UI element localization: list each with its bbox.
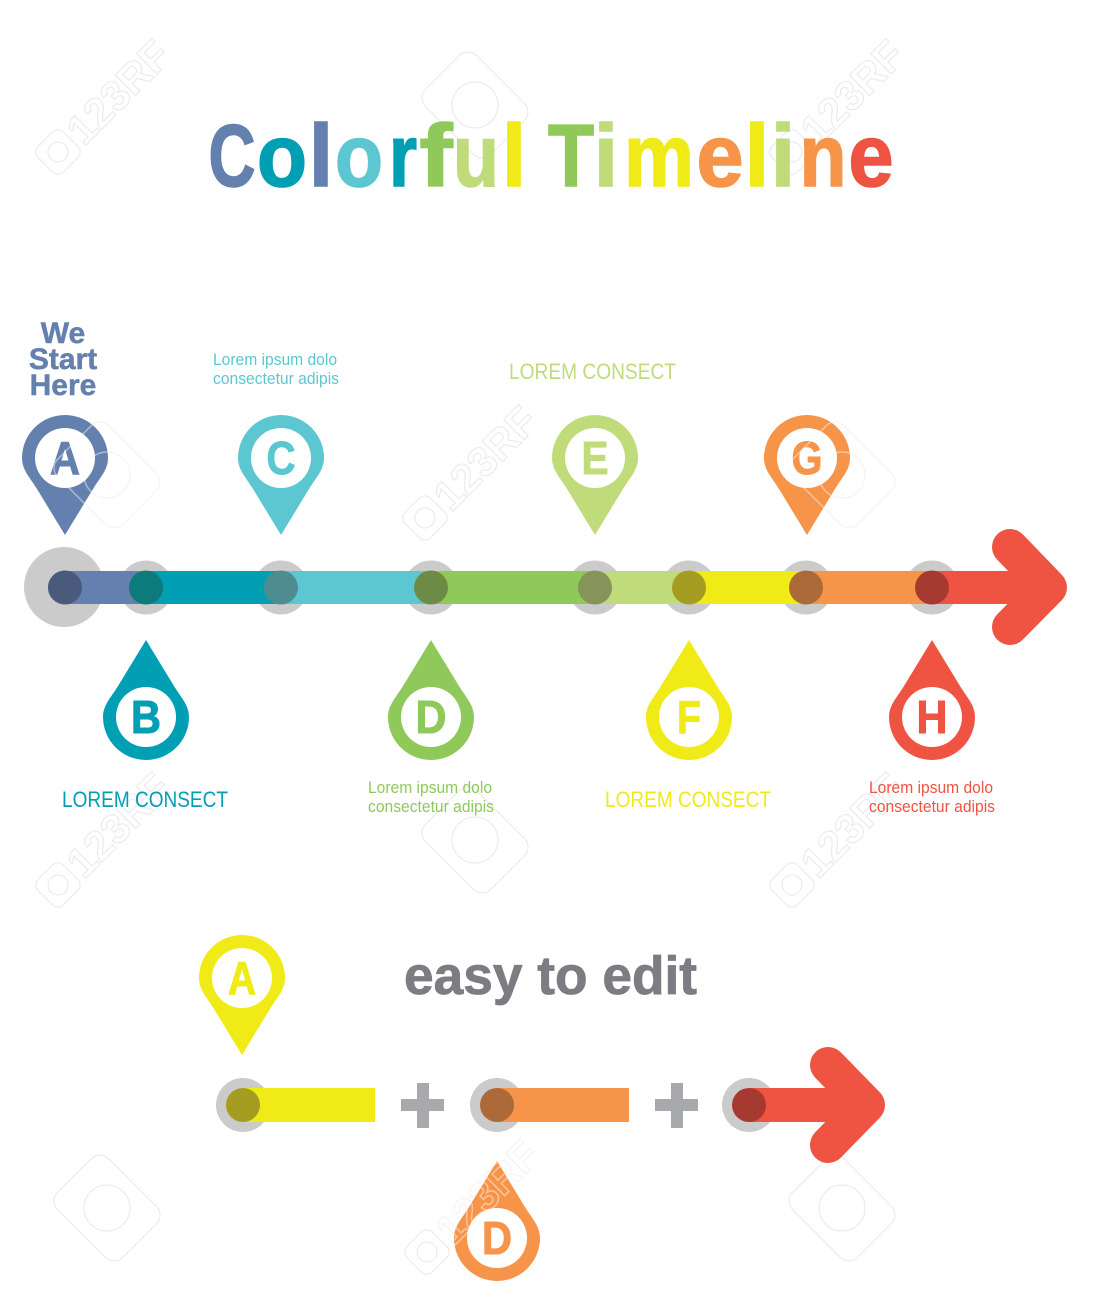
title: o (257, 106, 307, 205)
pin E: E (582, 432, 608, 484)
drop H: H (916, 691, 948, 743)
watermark stamps: 123RF (424, 397, 547, 519)
drop F: F (677, 691, 701, 743)
title: e (696, 106, 744, 205)
title: f (420, 106, 453, 205)
pin A yellow: A (228, 952, 256, 1004)
segment: red arrow (722, 1065, 867, 1145)
text block: B caption: LOREM CONSECT (62, 787, 228, 812)
pin A: A (50, 432, 80, 484)
title: i (594, 106, 618, 205)
title: l (502, 106, 526, 205)
text block: F caption: LOREM CONSECT (605, 787, 771, 812)
title: o (335, 106, 383, 205)
text block: E caption: LOREM CONSECT (509, 359, 676, 384)
pin A yellow (199, 935, 285, 1055)
title: l (745, 106, 769, 205)
title (208, 106, 894, 205)
segment: orange bar (470, 1078, 629, 1132)
title: l (309, 106, 333, 205)
heading: we start here: Start (29, 343, 97, 376)
main timeline arrow (24, 547, 1049, 627)
title: m (624, 106, 694, 205)
watermark stamps: 123RF (426, 1131, 549, 1253)
watermark stamps: 123RF (57, 764, 180, 886)
pin C (238, 415, 324, 535)
drop B (103, 640, 189, 760)
drop D orange (454, 1161, 540, 1281)
drop D orange: D (482, 1212, 512, 1264)
pin G (764, 415, 850, 535)
title: T (548, 106, 594, 205)
pin A (22, 415, 108, 535)
title: r (389, 106, 417, 205)
text block: D caption: Lorem ipsum dolo (368, 779, 492, 797)
text block: D caption (368, 779, 494, 816)
heading: we start here (29, 317, 97, 402)
watermark stamps (29, 31, 914, 1282)
drop D: D (416, 691, 446, 743)
title: n (800, 106, 846, 205)
watermark overlay on coloured shapes: 123RF (426, 1131, 549, 1253)
watermark stamps: 123RF (791, 31, 914, 153)
title: C (208, 106, 256, 205)
watermark stamps: 123RF (57, 31, 180, 153)
pin C: C (266, 432, 296, 484)
watermark stamps: 123RF (791, 764, 914, 886)
text block: C caption: Lorem ipsum dolo (213, 351, 337, 369)
heading: easy to edit: easy to edit (404, 946, 697, 1006)
title: e (848, 106, 894, 205)
drop H (889, 640, 975, 760)
text block: H caption: Lorem ipsum dolo (869, 779, 993, 797)
drop F (646, 640, 732, 760)
title: i (771, 106, 795, 205)
icon: plus (401, 1083, 444, 1128)
drop D (388, 640, 474, 760)
text block: C caption (213, 351, 339, 388)
icon: plus (655, 1083, 698, 1128)
text block: D caption: consectetur adipis (368, 798, 494, 816)
segment: yellow bar (216, 1078, 375, 1132)
pin G: G (792, 432, 822, 484)
heading: we start here: We (41, 317, 85, 350)
drop B: B (131, 691, 161, 743)
pin E (552, 415, 638, 535)
text block: H caption: consectetur adipis (869, 798, 995, 816)
text block: H caption (869, 779, 995, 816)
watermark overlay on coloured shapes (49, 417, 900, 1253)
text block: C caption: consectetur adipis (213, 370, 339, 388)
title: u (453, 106, 499, 205)
heading: we start here: Here (30, 369, 96, 402)
